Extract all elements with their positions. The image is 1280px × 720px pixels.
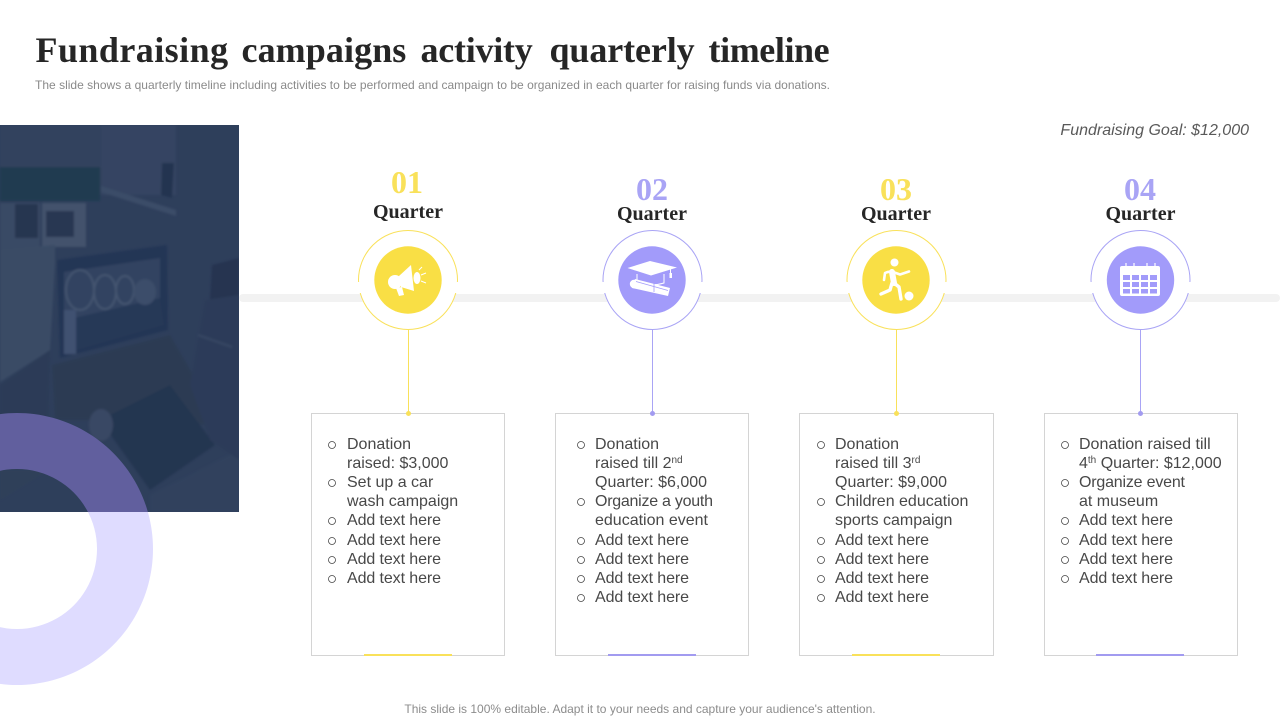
connector 2 bbox=[652, 330, 654, 413]
card 2 list: Add text here bbox=[595, 551, 689, 568]
connector 1 bbox=[408, 330, 410, 413]
card 3 list: raised till 3 bbox=[835, 455, 911, 472]
quarter 2 bbox=[556, 171, 748, 656]
ring 3 bbox=[844, 230, 949, 330]
card 3 list: Quarter: $9,000 bbox=[835, 474, 947, 491]
card 4 list: Organize event bbox=[1079, 474, 1186, 491]
card 3 list: sports campaign bbox=[835, 512, 952, 529]
card 3 list: Add text here bbox=[835, 551, 929, 568]
photo tint bbox=[0, 125, 232, 442]
card 3 list: Children education bbox=[835, 493, 968, 510]
card 4 list: Add text here bbox=[1079, 512, 1173, 529]
card 1 list: Set up a car bbox=[347, 474, 434, 491]
title: timeline bbox=[708, 30, 830, 70]
card 2 list: nd bbox=[671, 455, 683, 466]
subtitle: The slide shows a quarterly timeline including activities to be performed and campaign to be organized in each quarter for raising funds via donations. bbox=[35, 78, 830, 92]
card 2 bbox=[556, 411, 748, 656]
icon: football player bbox=[881, 258, 914, 300]
card 1 bbox=[312, 411, 504, 656]
card 2 list: Add text here bbox=[595, 570, 689, 587]
card 4 list: Add text here bbox=[1079, 551, 1173, 568]
icon: graduation cap bbox=[628, 261, 677, 296]
number 02: 02 bbox=[636, 171, 668, 207]
card 2 list: Organize a youth bbox=[595, 493, 713, 510]
card 2 list: Quarter: $6,000 bbox=[595, 474, 707, 491]
quarter 3 bbox=[800, 171, 994, 656]
quarter 4 bbox=[1044, 171, 1238, 656]
quarter 3 heading: Quarter bbox=[861, 203, 931, 225]
card 1 list: Add text here bbox=[347, 551, 441, 568]
card 2 list: Donation bbox=[595, 436, 659, 453]
card 1 list: Add text here bbox=[347, 532, 441, 549]
number 04: 04 bbox=[1124, 171, 1156, 207]
icon: calendar bbox=[1120, 263, 1160, 296]
ring 1 bbox=[356, 230, 460, 330]
card 4 list bbox=[1062, 436, 1222, 587]
card 1 list: Donation bbox=[347, 436, 411, 453]
connector 4 bbox=[1140, 330, 1142, 413]
title: Fundraising bbox=[36, 30, 229, 70]
card 1 list bbox=[328, 436, 458, 587]
number 01: 01 bbox=[391, 164, 423, 200]
card 3 list: Add text here bbox=[835, 532, 929, 549]
quarter 1 bbox=[312, 164, 504, 656]
card 1 list: wash campaign bbox=[346, 493, 458, 510]
title: quarterly bbox=[550, 30, 695, 70]
card 2 list: Add text here bbox=[595, 532, 689, 549]
card 1 list: Add text here bbox=[347, 570, 441, 587]
card 4 list: Add text here bbox=[1079, 570, 1173, 587]
card 1 list: raised: $3,000 bbox=[347, 455, 449, 472]
ring 4 bbox=[1088, 230, 1193, 330]
footer note: This slide is 100% editable. Adapt it to your needs and capture your audience's attention. bbox=[404, 702, 876, 716]
card 2 list bbox=[578, 436, 713, 606]
title: campaigns bbox=[242, 30, 406, 70]
card 3 list: Add text here bbox=[835, 589, 929, 606]
icon: megaphone bbox=[388, 265, 426, 296]
card 4 list: Donation raised till bbox=[1079, 436, 1211, 453]
card 2 list: Add text here bbox=[595, 589, 689, 606]
photo panel bbox=[0, 125, 239, 512]
card 3 list: Add text here bbox=[835, 570, 929, 587]
ring 2 bbox=[600, 230, 705, 330]
quarter 4 heading: Quarter bbox=[1106, 203, 1176, 225]
card 4 bbox=[1044, 411, 1238, 656]
connector 3 bbox=[896, 330, 898, 413]
card 4 list: at museum bbox=[1079, 493, 1158, 510]
card 2 list: raised till 2 bbox=[595, 455, 671, 472]
card 3 list: rd bbox=[911, 455, 920, 466]
card 4 list: th bbox=[1088, 455, 1096, 466]
fundraising goal: Fundraising Goal: $12,000 bbox=[1060, 122, 1249, 139]
card 4 list: 4 bbox=[1079, 455, 1088, 472]
quarter 1 heading: Quarter bbox=[373, 201, 443, 223]
number 03: 03 bbox=[880, 171, 912, 207]
title: activity bbox=[420, 30, 533, 70]
timeline bar bbox=[239, 294, 1280, 302]
decorative donut bbox=[0, 413, 153, 685]
card 3 bbox=[800, 411, 994, 656]
card 3 list: Donation bbox=[835, 436, 899, 453]
card 1 list: Add text here bbox=[347, 512, 441, 529]
card 2 list: education event bbox=[595, 512, 709, 529]
card 4 list: Quarter: $12,000 bbox=[1096, 455, 1222, 472]
quarter 2 heading: Quarter bbox=[617, 203, 687, 225]
card 4 list: Add text here bbox=[1079, 532, 1173, 549]
card 3 list bbox=[818, 436, 968, 606]
donut overlap on photo bbox=[0, 413, 148, 512]
